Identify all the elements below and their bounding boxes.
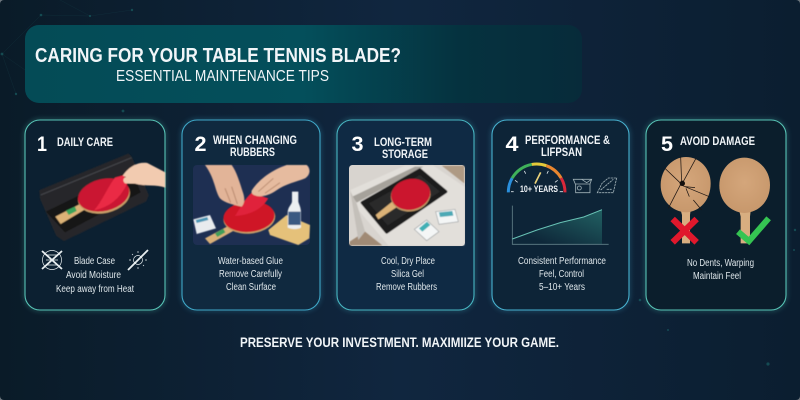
title: CARING FOR YOUR TABLE TENNIS BLADE? [35, 44, 401, 67]
illustration: cracked blade [661, 157, 711, 243]
illustration: paddle stored in drawer [349, 165, 465, 246]
gauge: 10+ years [508, 164, 565, 195]
text: changing rubbers tips: Remove Carefully [219, 269, 282, 280]
text: daily care tips: Blade Case [74, 256, 115, 267]
panel: performance and lifespan [492, 120, 629, 310]
text: daily care tips [56, 256, 134, 295]
icon: blade box [573, 179, 592, 193]
text: performance tips: 5–10+ Years [539, 282, 585, 293]
text: storage tips [376, 256, 437, 293]
text: performance tips: Feel, Control [539, 269, 584, 280]
illustration: removing rubber with glue and cloth [193, 165, 310, 245]
number 1: 1 [37, 132, 47, 156]
text: changing rubbers tips: Clean Surface [226, 282, 276, 293]
icon: green check [738, 218, 769, 241]
text: performance tips [518, 256, 606, 293]
number 4: 4 [506, 132, 519, 156]
text: storage tips: Silica Gel [391, 269, 424, 280]
gauge: 10+ years: 10+ YEARS [520, 184, 558, 195]
text: storage tips: Cool, Dry Place [381, 256, 435, 267]
number 3: 3 [352, 132, 364, 156]
panel: long-term storage [337, 120, 474, 310]
text: avoid damage tips: Maintain Feel [693, 271, 741, 282]
number 2: 2 [194, 132, 207, 156]
heading: long-term storage: STORAGE [382, 147, 428, 161]
heading: performance and lifespan: LIFPSAN [541, 145, 582, 159]
heading: when changing rubbers [213, 133, 297, 159]
heading: long-term storage: LONG-TERM [374, 135, 432, 149]
illustration: intact blade [719, 158, 770, 243]
footer tagline: PRESERVE YOUR INVESTMENT. MAXIMIIZE YOUR GAME. [240, 335, 559, 350]
text: changing rubbers tips [218, 256, 283, 293]
text: avoid damage tips [687, 258, 754, 282]
icon: blade tool [597, 178, 617, 193]
icon: no heat [128, 250, 148, 270]
heading: daily care: DAILY CARE [57, 135, 113, 149]
heading: long-term storage [374, 135, 432, 161]
heading: when changing rubbers: WHEN CHANGING [213, 133, 297, 147]
panel: when changing rubbers [182, 120, 320, 310]
text: avoid damage tips: No Dents, Warping [687, 258, 754, 269]
text: changing rubbers tips: Water-based Glue [218, 256, 283, 267]
text: storage tips: Remove Rubbers [376, 282, 437, 293]
heading: avoid damage: AVOID DAMAGE [680, 134, 755, 148]
heading: performance and lifespan [525, 133, 610, 159]
panel: avoid damage [646, 120, 786, 310]
text: daily care tips: Keep away from Heat [56, 284, 134, 295]
heading: when changing rubbers: RUBBERS [230, 145, 275, 159]
text: daily care tips: Avoid Moisture [66, 270, 121, 281]
chart: performance over time [512, 206, 609, 244]
icon: no moisture [42, 250, 62, 270]
text: performance tips: Consistent Performance [518, 256, 606, 267]
heading: performance and lifespan: PERFORMANCE & [525, 133, 610, 147]
panel: daily care [25, 120, 165, 310]
illustration: paddle in case [41, 155, 165, 240]
header banner [25, 25, 582, 103]
number 5: 5 [661, 132, 673, 156]
icon: red cross [673, 219, 697, 242]
subtitle: ESSENTIAL MAINTENANCE TIPS [116, 68, 329, 85]
